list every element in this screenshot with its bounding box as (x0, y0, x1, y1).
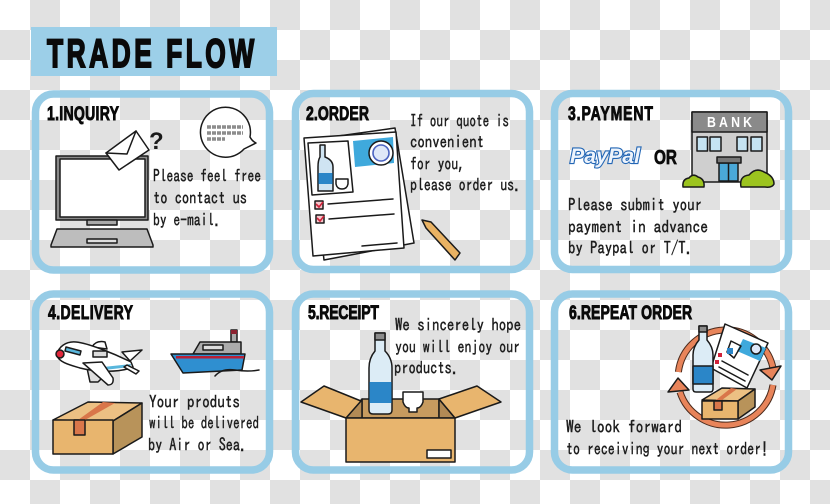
text: contact (153, 168, 261, 229)
text: contact: to contact us (153, 190, 247, 207)
panel: 3 payment (554, 94, 788, 270)
icon: question mark: ? (149, 128, 164, 155)
icon: bank: BANK (707, 114, 752, 130)
text: payment note: by Paypal or T/T. (568, 238, 693, 257)
text: contact: by e-mail. (153, 212, 221, 229)
icon: order sheet small (711, 324, 768, 388)
heading: delivery: 4.DELIVERY (48, 302, 134, 324)
icon: airplane (56, 342, 142, 385)
text: repeat note (566, 419, 768, 458)
icon: bottle small (693, 326, 713, 392)
panel: 6 repeat order (554, 294, 788, 470)
icon: open box with bottle and cup (301, 333, 501, 462)
panel: 4 delivery (36, 294, 270, 470)
icon: bank (683, 112, 774, 187)
icon: order sheets (304, 128, 414, 260)
text: order prompt: If our quote is (410, 113, 509, 130)
heading: receipt: 5.RECEIPT (308, 302, 380, 324)
text: receipt note: products. (394, 360, 459, 377)
text: order prompt: please order us. (410, 177, 521, 194)
text: delivery note: by Air or Sea. (148, 437, 247, 454)
icon: laptop computer (51, 156, 153, 247)
panel: 1 inquiry (36, 94, 270, 270)
panel: 2 order (296, 94, 530, 270)
text: contact: Please feel free (153, 168, 261, 185)
heading: payment: 3.PAYMENT (568, 103, 653, 125)
text: receipt note: you will enjoy our (395, 339, 520, 356)
title banner: TRADE FLOW (47, 32, 254, 76)
icon: recycling arrows (668, 330, 781, 425)
icon: envelope (106, 131, 149, 170)
text: delivery note: Your produts (149, 394, 240, 411)
text: payment note (568, 197, 708, 257)
icon: pencil (422, 220, 460, 260)
label: OR: OR (654, 147, 677, 169)
icon: speech bubble (200, 107, 256, 157)
text: payment note: payment in advance (568, 219, 708, 236)
text: order prompt: convenient (410, 134, 484, 151)
panel: 5 receipt (296, 294, 530, 470)
icon: cardboard box (53, 402, 142, 454)
heading: inquiry: 1.INQUIRY (47, 103, 120, 125)
text: receipt note: We sincerely hope (395, 317, 521, 334)
text: payment note: Please submit your (568, 197, 702, 214)
text: order prompt: for you, (410, 156, 465, 173)
logo: PayPal: PayPal (570, 145, 641, 168)
text: repeat note: to receiving your next order! (566, 440, 768, 458)
heading: order: 2.ORDER (306, 103, 369, 125)
icon: ship (171, 330, 259, 376)
text: delivery note (148, 394, 259, 454)
text: receipt note (394, 317, 521, 377)
icon: box small (702, 388, 755, 419)
text: delivery note: will be delivered (149, 415, 259, 432)
heading: repeat order: 6.REPEAT ORDER (569, 302, 692, 324)
text: repeat note: We look forward (566, 419, 682, 436)
text: order prompt (410, 113, 521, 194)
